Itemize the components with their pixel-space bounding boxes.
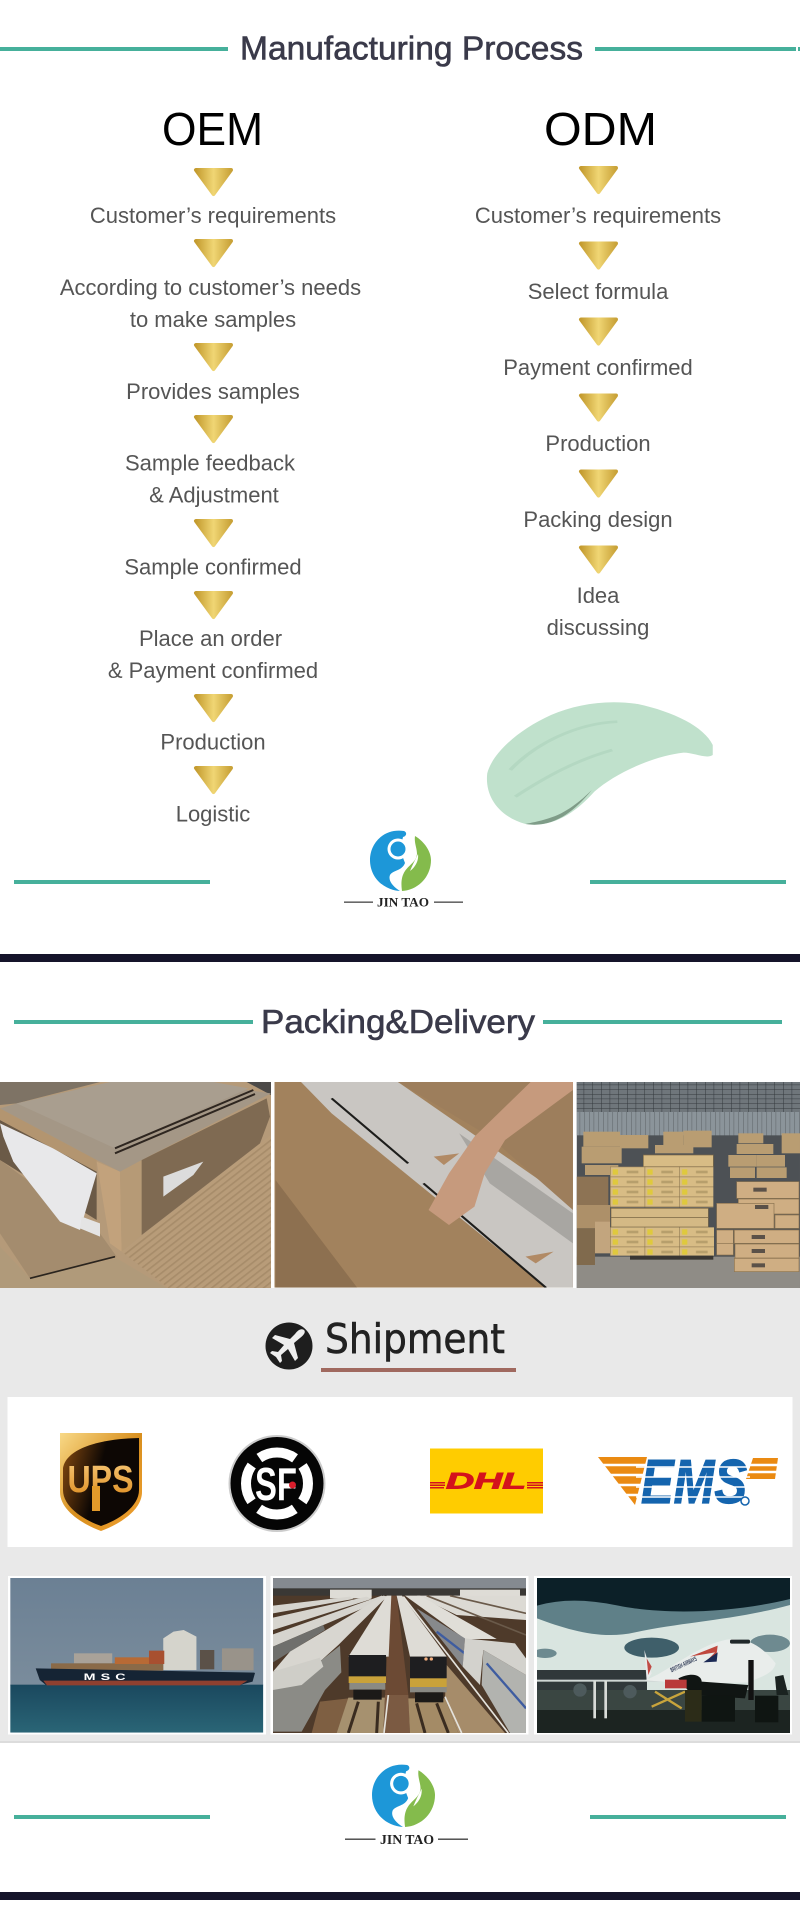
photo row: transport: [8, 1576, 792, 1734]
arrow 3: [581, 320, 616, 344]
white photo frames: [8, 1576, 792, 1734]
step 6: discussing: [547, 615, 649, 640]
OEM heading: OEM: [162, 103, 263, 155]
arrow 6: [581, 548, 616, 572]
step 4: [125, 450, 296, 508]
logo: EMS: EMS: [641, 1448, 747, 1517]
step 6: [108, 626, 318, 683]
step 1: Customer’s requirements: [90, 203, 336, 228]
panel: shipment: [0, 1288, 800, 1743]
dark divider bar: [0, 1892, 800, 1900]
footer band: [0, 1765, 800, 1900]
photo: airplane under storm clouds: [533, 1578, 790, 1733]
logo: UPS: [60, 1433, 142, 1531]
dark divider bar: [0, 954, 800, 962]
photo: hand placing board: [274, 1082, 573, 1288]
photo row: packing: [0, 1082, 800, 1288]
logo: SF: SF: [255, 1458, 297, 1510]
logo: DHL: DHL: [446, 1468, 526, 1494]
arrow 4: [581, 396, 616, 420]
step 4: Sample feedback: [125, 450, 296, 476]
step 2: Select formula: [528, 279, 669, 304]
step 6: [547, 583, 649, 640]
step 6: & Payment confirmed: [108, 658, 318, 683]
column: OEM: [60, 103, 361, 826]
icon: airplane: [266, 1322, 312, 1370]
arrow 7: [196, 696, 231, 720]
grey background: [0, 1288, 800, 1743]
photo: container ship: [10, 1578, 263, 1733]
step 4: Production: [545, 431, 651, 456]
photo: warehouse stacks: [577, 1082, 800, 1288]
arrow 2: [196, 241, 231, 265]
arrow 2: [581, 244, 616, 268]
arrow 5: [196, 521, 231, 545]
logo: Jin Tao: [344, 831, 463, 910]
logo: SF: [228, 1435, 326, 1532]
ODM heading: ODM: [544, 103, 657, 155]
arrow 4: [196, 417, 231, 441]
photo: airplane under storm clouds: BRITISH AIRWAYS: [670, 1656, 698, 1674]
column: ODM: [475, 103, 721, 640]
step 6: Idea: [577, 583, 620, 608]
step 2: According to customer’s needs: [60, 275, 361, 300]
step 4: & Adjustment: [149, 482, 279, 508]
panel: manufacturing process: [0, 30, 800, 910]
arrow 3: [196, 345, 231, 369]
heading: Manufacturing Process: Manufacturing Process: [240, 30, 583, 68]
step 2: [60, 275, 361, 332]
arrow 1: [581, 168, 616, 192]
logo: Jin Tao: [345, 1765, 468, 1848]
logo: Jin Tao: JIN TAO: [380, 1833, 434, 1848]
arrow 8: [196, 768, 231, 792]
arrow 5: [581, 472, 616, 496]
heading: Manufacturing Process: [0, 30, 800, 68]
heading: Packing&Delivery: Packing&Delivery: [261, 1003, 536, 1040]
divider lines: [14, 1815, 786, 1819]
step 3: Payment confirmed: [503, 355, 693, 380]
step 3: Provides samples: [126, 379, 300, 404]
panel: packing and delivery: [0, 1003, 800, 1288]
step 1: Customer’s requirements: [475, 203, 721, 228]
step 2: to make samples: [130, 307, 296, 332]
step 6: Place an order: [139, 626, 282, 651]
heading: Packing&Delivery: [14, 1003, 782, 1040]
arrow 1: [196, 170, 231, 194]
arrow 6: [196, 593, 231, 617]
step 7: Production: [160, 730, 266, 754]
heading: Shipment: Shipment: [325, 1315, 505, 1363]
step 5: Packing design: [523, 507, 673, 532]
logo: DHL: [430, 1448, 543, 1514]
divider lines: [14, 880, 786, 884]
photo: carton with foam: [0, 1082, 271, 1288]
photo: trains in yard: [273, 1578, 526, 1733]
grey panel bottom edge: [0, 1741, 800, 1743]
step 8: Logistic: [176, 802, 250, 826]
photo: container ship: MSC: [84, 1671, 126, 1682]
image: green cream swatch: [487, 702, 713, 825]
white carrier panel: [8, 1397, 792, 1547]
heading: Shipment: [266, 1315, 516, 1372]
step 5: Sample confirmed: [124, 554, 302, 580]
logo: Jin Tao: JIN TAO: [377, 896, 429, 910]
logo: UPS: UPS: [68, 1459, 134, 1501]
